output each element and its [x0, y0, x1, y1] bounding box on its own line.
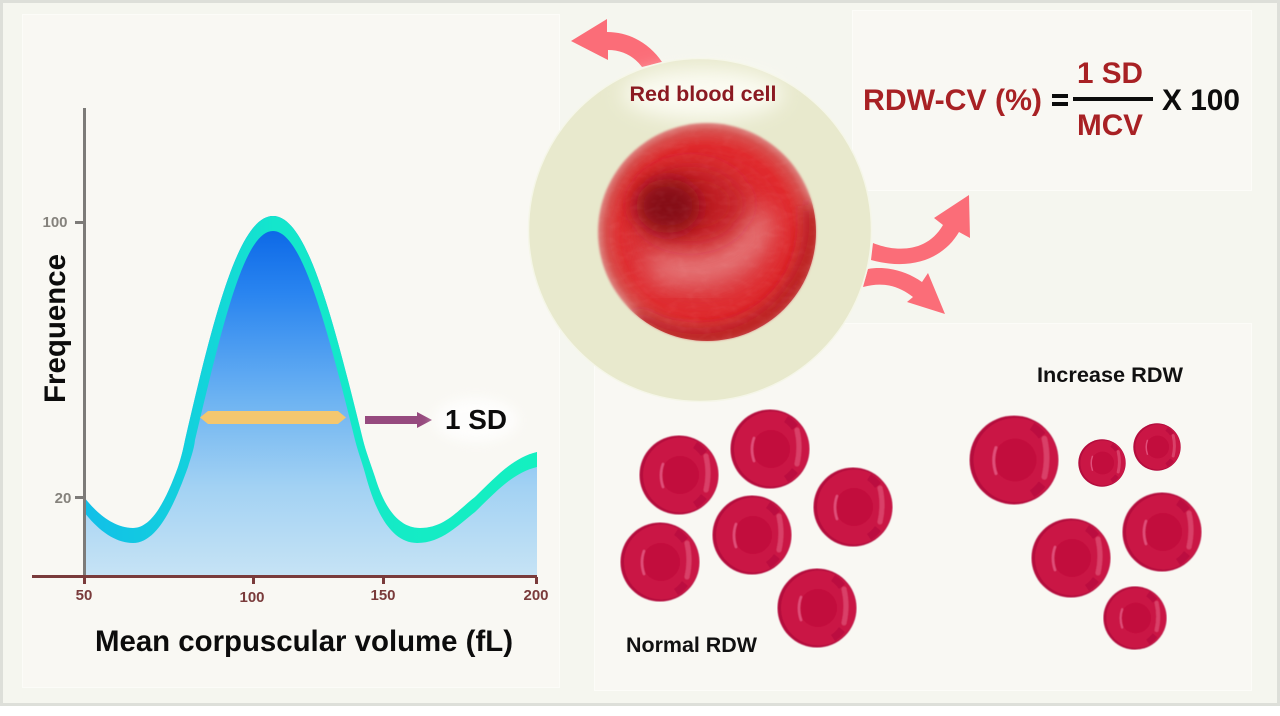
- arrow: to formula: [871, 195, 970, 264]
- x tick label 200: 200: [523, 587, 549, 604]
- chart area fill: [84, 216, 537, 576]
- formula left side: RDW-CV (%): [863, 84, 1042, 117]
- chart: MCV distribution curve: [32, 108, 549, 606]
- group: normal RDW cells: [620, 410, 892, 648]
- increase RDW label: Increase RDW: [1037, 363, 1184, 387]
- formula: RDW-CV: [863, 57, 1240, 142]
- numerator: 1 SD: [1077, 57, 1143, 90]
- label glow: [623, 69, 783, 119]
- cell label: Red blood cell: [630, 83, 776, 106]
- x tick label 100: 100: [239, 589, 265, 606]
- x tick label 150: 150: [370, 587, 396, 604]
- y tick label 100: 100: [42, 214, 68, 231]
- 1 SD label: 1 SD: [445, 404, 507, 435]
- curve band: [84, 216, 537, 543]
- 1 SD width bar: [200, 411, 346, 424]
- arrow: to histogram: [571, 19, 662, 67]
- panel: RDW comparison: [594, 324, 1252, 690]
- arrow: to 1 SD: [365, 412, 432, 428]
- equals sign: [1052, 94, 1068, 106]
- x tick label 50: 50: [76, 587, 92, 604]
- red blood cell disc: [528, 58, 872, 402]
- x axis: [32, 575, 538, 584]
- y axis title: Frequence: [39, 254, 72, 403]
- multiplier: X 100: [1162, 84, 1240, 117]
- illustration: red blood cell: [598, 123, 816, 341]
- 1 SD label: [434, 398, 518, 442]
- normal RDW label: Normal RDW: [626, 634, 757, 657]
- arrow: to RDW comparison: [863, 268, 945, 314]
- y axis: [75, 108, 86, 577]
- x axis title: Mean corpuscular volume (fL): [95, 625, 513, 658]
- y tick label 20: 20: [55, 490, 71, 507]
- denominator: MCV: [1077, 109, 1143, 142]
- panel: histogram: [22, 14, 560, 688]
- group: increased RDW cells: [970, 416, 1202, 650]
- fraction line: [1073, 97, 1153, 101]
- panel: formula: [852, 10, 1252, 190]
